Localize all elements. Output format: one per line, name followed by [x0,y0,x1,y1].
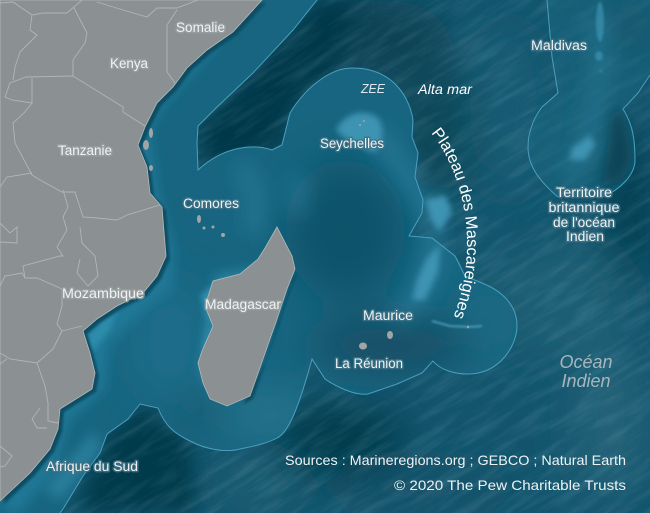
label: Océan Indien: Indien [561,371,611,391]
island: Maurice [387,331,393,339]
label: Kenya: Kenya [110,56,148,71]
source credits [285,452,626,493]
bank: Nazareth and Cargados [412,245,440,300]
glow: Chagos-Maldives ridge [570,12,600,180]
label: ZEE: ZEE [360,81,385,96]
label: Tanzanie: Tanzanie [58,143,112,158]
country labels [46,20,620,474]
island: La Réunion [359,342,367,350]
label: La Réunion: La Réunion [335,356,403,371]
island: Comoros [197,215,225,237]
label: Océan Indien [559,352,613,391]
national borders [0,0,198,467]
EEZ fill: Maldives and British Indian Ocean Territory [528,0,650,197]
islands [143,120,469,350]
label: Madagascar: Madagascar [205,297,282,312]
coastal shelf glow [2,56,248,513]
label: Alta mar: Alta mar [417,82,473,97]
curved label: Plateau des Mascareignes: Plateau des Mascareignes [432,127,478,318]
label: Somalie: Somalie [176,20,225,35]
label: Mozambique: Mozambique [62,286,144,301]
copyright line: © 2020 The Pew Charitable Trusts [394,477,626,493]
ocean depth shading [210,0,650,513]
glow: Seychelles to Saya de Malha ridge [375,130,435,320]
exclusive economic zone fill: western Indian Ocean [0,0,516,513]
bank: Chagos [570,135,595,160]
Rodrigues ridge highlight [432,321,482,327]
label: Maurice: Maurice [363,308,413,323]
deep basin between Africa and Seychelles [200,0,365,170]
label: Territoire britannique de l'océan Indien [548,185,620,244]
label: Territoire britannique de l'océan Indien: britannique [548,200,620,215]
label: Territoire britannique de l'océan Indien: de l'océan [553,215,615,230]
coast shadow: mainland and Madagascar [4,3,298,504]
ridge glows [240,12,600,320]
bank: Maldives atolls [595,2,604,72]
EEZ inner shading [148,156,463,435]
glow: Comoros ridges [240,165,255,235]
label: Comores: Comores [183,196,239,211]
label: Maldivas: Maldivas [531,38,587,53]
label: Territoire britannique de l'océan Indien: Territoire [556,185,612,200]
label: Afrique du Sud: Afrique du Sud [46,459,138,474]
deep basin south of Madagascar [75,404,195,513]
land: Madagascar [198,227,295,406]
dark deep channel in British territory [603,108,632,188]
sources line: Sources : Marineregions.org ; GEBCO ; Natural Earth [285,452,626,468]
bank: Seychelles [336,113,382,152]
island: Zanzibar group [143,128,153,171]
label: Océan Indien: Océan [559,352,613,372]
bank: Saya de Malha [425,195,452,232]
island: Seychelles [359,120,365,126]
label: Territoire britannique de l'océan Indien: Indien [566,229,604,244]
shallow banks [336,2,604,300]
land: mainland Africa [0,0,262,501]
island: Rodrigues [467,326,469,328]
shelf wedges: Mozambique and west Madagascar [88,285,211,349]
label: Seychelles: Seychelles [320,136,384,151]
